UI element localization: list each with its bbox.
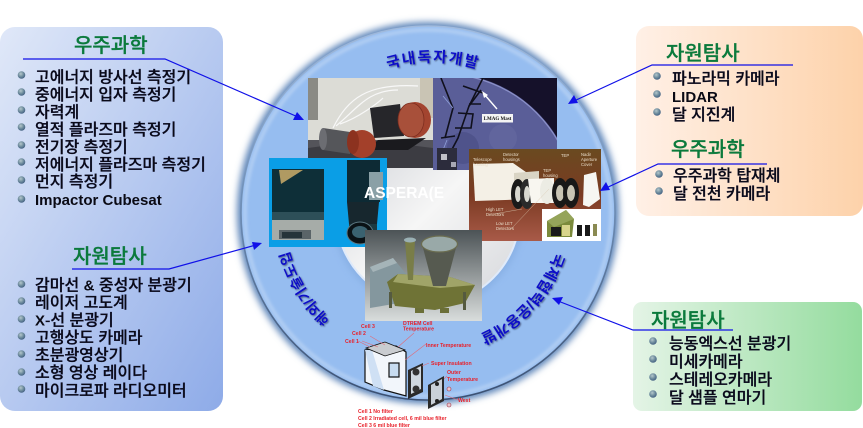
labels: cell diagram: West <box>458 398 471 404</box>
diagram: DTREM cell <box>345 321 478 428</box>
labels: cell diagram: Cell 1 No filter <box>358 409 393 415</box>
photo: instruments with red covers <box>308 78 433 168</box>
text: space science (left): Impactor Cubesat <box>35 192 162 209</box>
photo: telescope detector assembly: Nadir <box>581 152 592 157</box>
text: resource exploration (right bottom): 미세카메라 <box>669 353 743 371</box>
arrow: right bottom to ring <box>552 297 733 330</box>
text: space science (right): 달 전천 카메라 <box>673 185 770 203</box>
text: resource exploration (right bottom): 능동엑스선 분광기 <box>669 335 791 353</box>
text: resource exploration (left): 마이크로파 라디오미터 <box>35 382 187 400</box>
text: resource exploration (right bottom) <box>649 309 791 407</box>
text: resource exploration (left): 감마선 & 중성자 분광기 <box>35 276 192 294</box>
photo: telescope detector assembly: housing <box>473 162 488 167</box>
photo: telescope detector assembly: Aperture <box>581 157 598 162</box>
labels: cell diagram: DTREM Cell <box>403 321 433 327</box>
text: resource exploration (left) <box>18 245 192 400</box>
text: resource exploration (right top): 달 지진계 <box>672 106 735 124</box>
photo: telescope detector assembly <box>469 149 601 241</box>
photo: telescope detector assembly: Cover <box>581 162 593 167</box>
panel: left <box>0 27 223 411</box>
labels: cell diagram <box>345 321 478 428</box>
labels: cell diagram: Inner Temperature <box>426 343 471 349</box>
text: resource exploration (left): 고행상도 카메라 <box>35 329 143 347</box>
text: space science (left): 자력계 <box>35 104 79 122</box>
text: resource exploration (right top): 자원탐사 <box>666 42 740 65</box>
photo: telescope detector assembly: housing <box>543 173 558 178</box>
arrow: right middle to detector <box>600 164 767 191</box>
photo: moon with magnetometer mast: LMAG Mast <box>484 117 512 122</box>
text: resource exploration (right top): LIDAR <box>672 89 718 106</box>
arrow: left bottom to blue photo <box>72 242 262 269</box>
text: resource exploration (left): 자원탐사 <box>73 245 147 268</box>
photo: telescope detector assembly: TEP <box>543 168 551 173</box>
arrow: right top to moon <box>568 65 793 104</box>
photo: telescope detector assembly: Telescope <box>473 157 493 162</box>
text: space science (left): 중에너지 입자 측정기 <box>35 86 176 104</box>
photo: telescope detector assembly: Detectors <box>486 212 504 217</box>
panel: right top <box>636 26 863 216</box>
text: resource exploration (right top): 파노라믹 카메라 <box>672 70 780 88</box>
labels: cell diagram: Cell 1 <box>345 339 359 345</box>
photo: telescope detector assembly: housings <box>503 157 520 162</box>
text: resource exploration (right bottom): 스테레오카메라 <box>669 371 772 389</box>
text: space science (left): 우주과학 <box>74 34 148 57</box>
label: international cooperation: 국제협력/운용개발 <box>481 254 567 347</box>
photo: moon with magnetometer mast <box>433 78 557 170</box>
text: resource exploration (right bottom): 달 샘플 연마기 <box>669 389 766 407</box>
text: space science (left): 열적 플라즈마 측정기 <box>35 121 176 139</box>
text: resource exploration (left): X-선 분광기 <box>35 312 114 330</box>
photo: green radiometer model <box>365 230 482 321</box>
text: space science (left): 먼지 측정기 <box>35 173 113 191</box>
arrow: left top to instruments <box>23 59 304 120</box>
panel: right bottom <box>633 302 862 411</box>
photo: telescope detector assembly: Detector <box>503 152 519 157</box>
label: overseas technology: 해외/기술도입 <box>278 252 330 328</box>
photo label: ASPERA: ASPERA(E <box>364 185 444 202</box>
labels: cell diagram: Temperature <box>447 377 478 383</box>
label: domestic development: 국내독자개발 <box>386 50 480 71</box>
text: space science (left) <box>18 34 206 209</box>
text: space science (left): 저에너지 플라즈마 측정기 <box>35 156 206 174</box>
text: resource exploration (right bottom): 자원탐사 <box>651 309 725 332</box>
labels: cell diagram: Cell 2 Irradiated cell, 6 mil blue filter <box>358 416 447 422</box>
text: space science (left): 전기장 측정기 <box>35 138 128 156</box>
text: resource exploration (left): 소형 영상 레이다 <box>35 364 147 382</box>
labels: cell diagram: Outer <box>447 370 461 376</box>
text: resource exploration (right top) <box>653 42 780 124</box>
text: resource exploration (left): 초분광영상기 <box>35 346 123 364</box>
photo: telescope detector assembly: High LET <box>486 207 504 212</box>
labels: cell diagram: Super Insulation <box>431 361 472 367</box>
photo: telescope detector assembly: Low LET <box>496 221 513 226</box>
text: space science (right): 우주과학 탑재체 <box>673 167 780 185</box>
labels: cell diagram: Cell 2 <box>352 331 366 337</box>
photo: blue ASPERA instrument <box>269 158 387 247</box>
text: resource exploration (left): 레이저 고도계 <box>35 294 128 312</box>
text: space science (left): 고에너지 방사선 측정기 <box>35 68 191 86</box>
photo: telescope detector assembly: Detectors <box>496 226 514 231</box>
diagram: concentric circle <box>237 22 619 404</box>
labels: cell diagram: Temperature <box>403 326 434 332</box>
labels: cell diagram: Cell 3 <box>361 324 375 330</box>
text: space science (right) <box>655 138 780 203</box>
photo: telescope detector assembly: TEP <box>561 153 569 158</box>
text: space science (right): 우주과학 <box>671 138 745 161</box>
